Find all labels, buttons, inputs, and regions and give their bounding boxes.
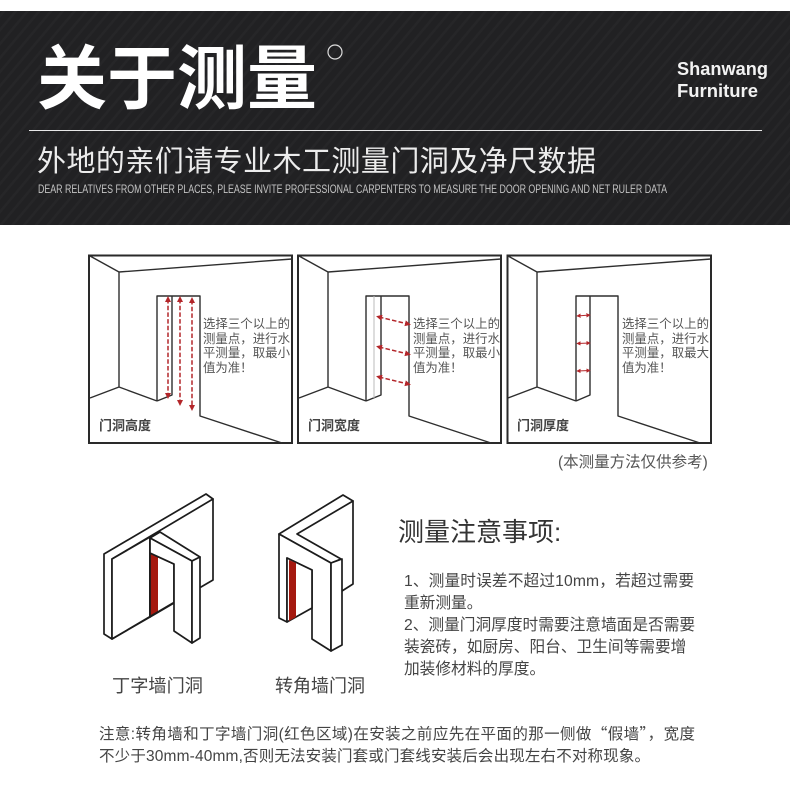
diagram: T-shaped wall door opening [104,494,213,643]
red false wall area [150,553,158,616]
text block: width instructions: 选择三个以上的 [413,316,500,331]
text block: width instructions [413,316,501,376]
footnote: 不少于30mm-40mm,否则无法安装门套或门套线安装后会出现左右不对称现象。 [99,747,650,765]
text block: height instructions: 选择三个以上的 [203,316,290,331]
heading: measurement notes: 测量注意事项: [398,517,561,547]
text block: measurement notes: 装瓷砖，如厨房、阳台、卫生间等需要增 [404,638,686,656]
footnote: 注意:转角墙和丁字墙门洞(红色区域)在安装之前应先在平面的那一侧做“假墙”，宽度 [99,722,695,744]
text block: thickness instructions: 平测量，取最大 [622,346,709,360]
subtitle: 外地的亲们请专业木工测量门洞及净尺数据 [37,145,596,178]
panel: door opening thickness [508,256,711,443]
icon: degree circle [328,45,342,59]
panel label: 门洞宽度 [308,418,360,433]
caption: corner wall: 转角墙门洞 [275,676,365,696]
text block: thickness instructions: 选择三个以上的 [622,316,709,331]
panel label: 门洞厚度 [517,418,569,433]
arrows: width measurement [379,317,408,384]
text block: width instructions: 平测量，取最小 [413,346,501,360]
footnote [99,722,695,765]
text block: thickness instructions: 值为准！ [622,358,672,376]
text block: measurement notes: 2、测量门洞厚度时需要注意墙面是否需要 [404,615,695,634]
caption: T-shaped wall: 丁字墙门洞 [112,676,203,696]
brand name: Shanwang [677,59,768,79]
arrows: height measurement [168,299,192,408]
text block: measurement notes: 加装修材料的厚度。 [404,660,545,678]
text block: height instructions: 平测量，取最小 [203,346,291,360]
header banner [0,11,790,225]
reference note: (本测量方法仅供参考) [558,453,708,471]
text block: width instructions: 值为准！ [413,358,463,376]
text block: width instructions: 测量点，进行水 [413,332,501,346]
text block: height instructions [203,316,291,376]
arrows: thickness measurement [577,315,590,371]
title: 关于测量 [37,40,317,118]
panel label: 门洞高度 [99,418,151,433]
text block: thickness instructions: 测量点，进行水 [622,332,710,346]
text block: height instructions: 测量点，进行水 [203,332,291,346]
text block: thickness instructions [622,316,710,376]
brand name second line: Furniture [677,81,758,101]
diagram: corner wall door opening [279,495,353,651]
panel: door opening height [89,256,292,443]
panel: door opening width [298,256,501,443]
red false wall area [289,560,296,621]
text block: measurement notes [404,572,695,678]
text block: measurement notes: 1、测量时误差不超过10mm，若超过需要 [404,572,694,590]
text block: measurement notes: 重新测量。 [404,594,482,612]
text block: height instructions: 值为准！ [203,358,253,376]
